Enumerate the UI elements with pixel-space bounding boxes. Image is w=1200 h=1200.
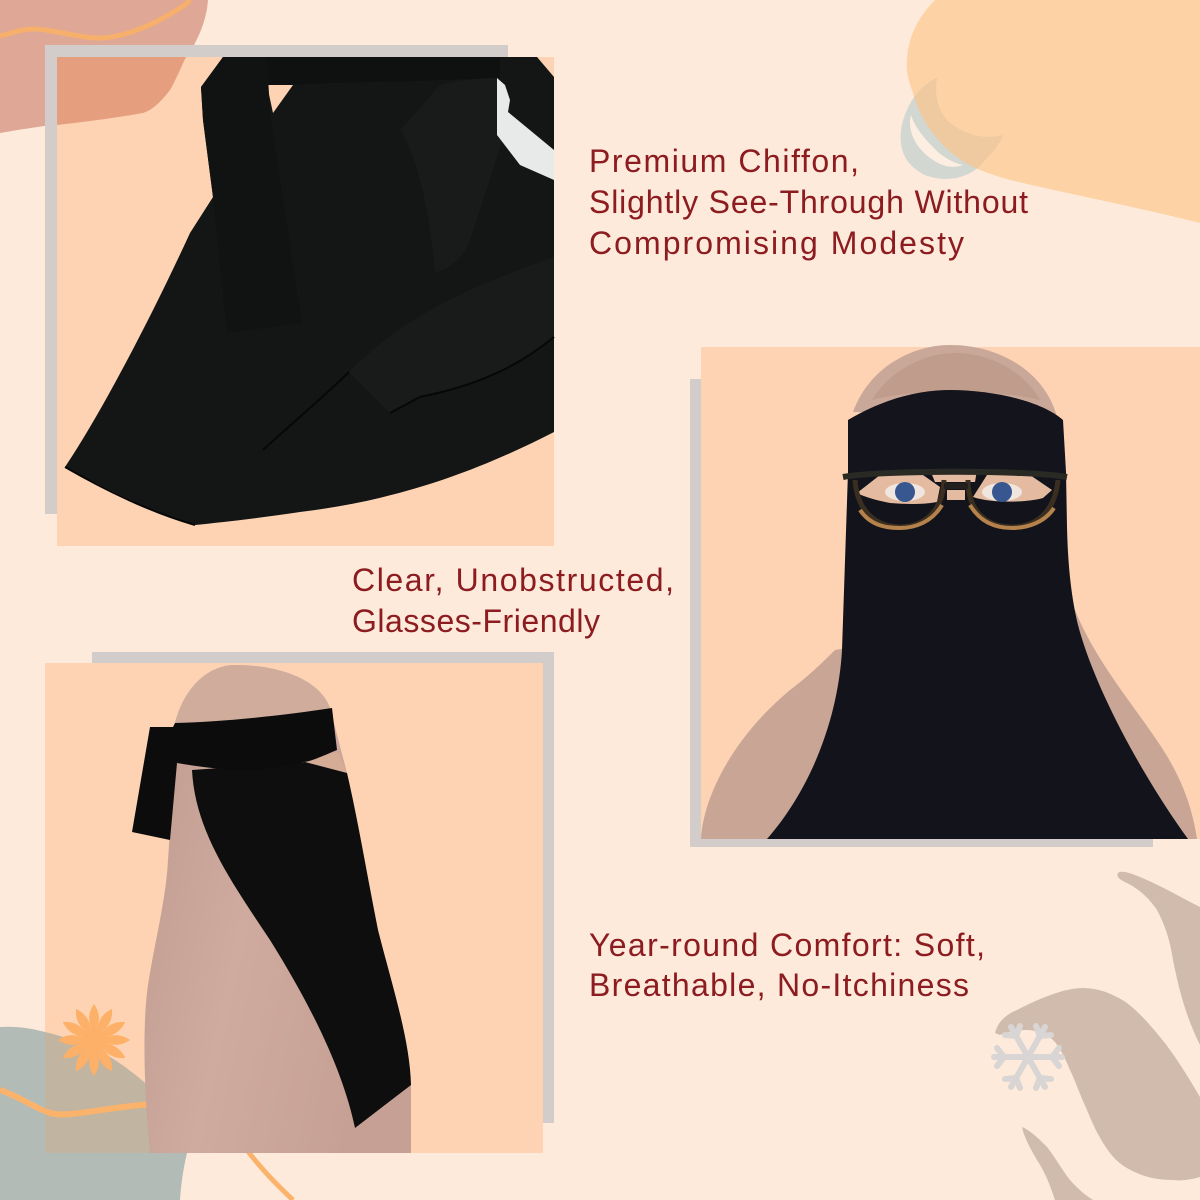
decoration: blob overlap [57,57,186,125]
photo: niqab veil side [192,762,411,1128]
text: year-round comfort [589,927,985,1003]
photo: fabric strap [201,57,302,333]
decoration: bottom-left blob [0,1027,293,1200]
decoration: blob overlap [45,1032,150,1153]
panel: chiffon close-up [57,57,554,546]
icon: snowflake [994,1026,1062,1088]
decoration: bottom-right leaves [995,872,1200,1200]
photo: cap inner fold [872,353,1040,400]
photo: skin through lenses [857,470,1052,504]
photo: headband and tie [132,708,337,840]
icon: orange sun [58,1004,130,1076]
text: glasses friendly: Clear, Unobstructed, [352,562,674,598]
photo: white label [497,78,554,180]
text: premium chiffon: Compromising Modesty [589,225,964,261]
photo: top band [267,57,500,85]
photo: fabric sheen [400,78,510,272]
panel: side view [45,663,543,1153]
icon: crescent moon [901,78,1003,179]
text: premium chiffon: Premium Chiffon, [589,143,859,179]
photo: glasses [843,472,1067,528]
photo: peach notch [267,85,293,113]
decoration: top-right blob [907,0,1200,223]
photo: shoulders [701,610,1197,839]
photo: lower fabric fold [349,257,554,413]
photo: blue eyes [885,482,1022,502]
frame: panel three shadow [92,652,554,1123]
text: glasses friendly [352,562,674,639]
photo: head wrap highlight [175,665,330,723]
panel: front view with glasses [701,345,1200,839]
frame: panel one shadow [45,45,508,514]
photo: black chiffon fabric [65,57,554,525]
photo: head cap [853,345,1057,417]
decoration: orange line overlap [45,1104,152,1114]
photo: niqab veil [767,472,1188,839]
frame: panel two shadow [690,379,1153,847]
photo: fabric edge lines [65,337,554,525]
text: premium chiffon: Slightly See-Through Without [589,184,1028,220]
text: premium chiffon [589,143,1028,261]
photo: pink hijab body [144,665,411,1153]
text: glasses friendly: Glasses-Friendly [352,603,600,639]
photo: skin at veil edge [303,752,347,773]
text: year-round comfort: Breathable, No-Itchiness [589,967,969,1003]
text: year-round comfort: Year-round Comfort: Soft, [589,927,985,963]
photo: headband [848,390,1066,472]
decoration: top-left blob [0,0,208,133]
